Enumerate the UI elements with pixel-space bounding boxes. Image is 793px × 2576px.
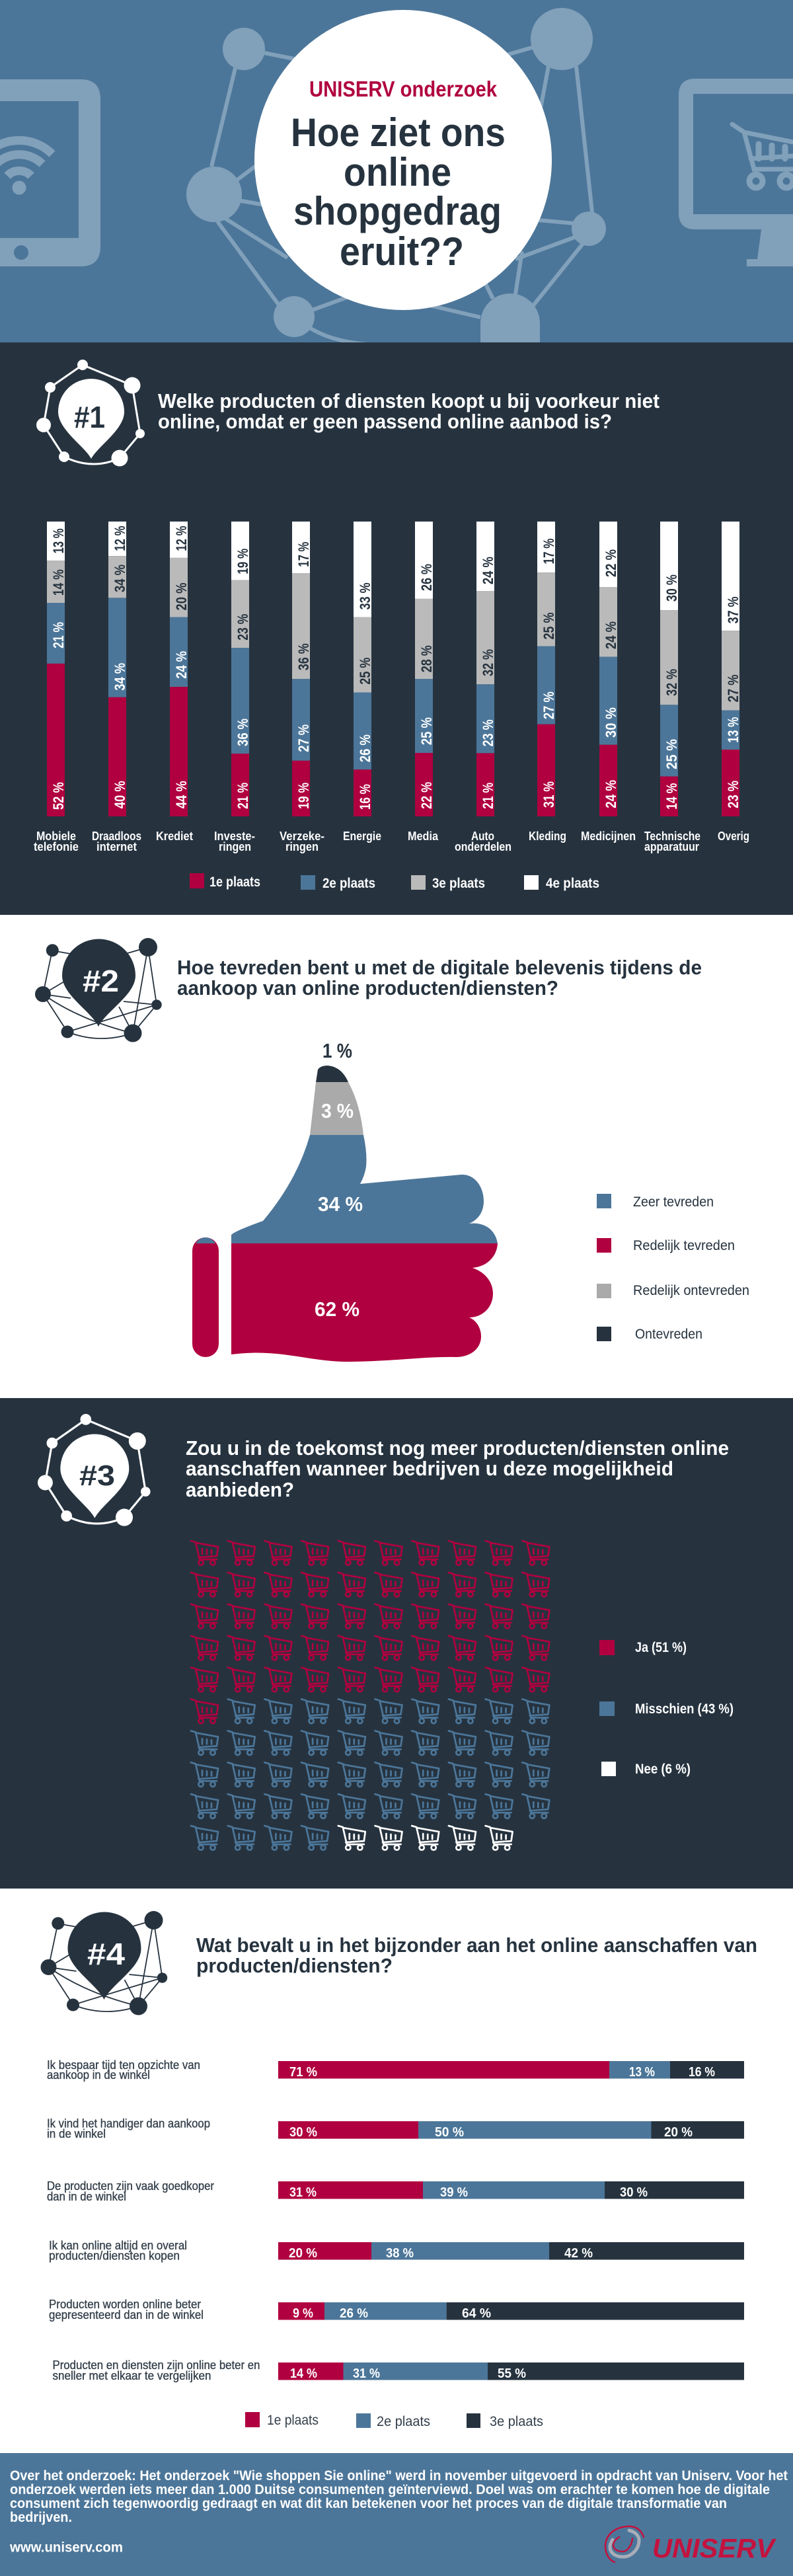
bar: Investeringen: 19 % <box>235 549 251 574</box>
legend 4: 1e plaats <box>267 2413 319 2428</box>
bar: Overig: 37 % <box>725 596 741 623</box>
icon: #4 pin <box>41 1911 167 2015</box>
icon: monitor with cart <box>679 79 793 266</box>
bar: Technische apparatuur: 30 % <box>663 574 680 602</box>
heading 4: Wat bevalt u in het bijzonder aan het online aanschaffen van <box>196 1933 757 1957</box>
bar: Energie: 26 % <box>357 734 373 762</box>
logo: Uniserv <box>605 2526 777 2563</box>
bar: Kleding: 25 % <box>541 612 557 640</box>
legend 1: 4e plaats <box>546 876 599 891</box>
bar: Auto onderdelen: 21 % <box>480 783 496 809</box>
heading 4: producten/diensten? <box>196 1954 393 1977</box>
thumb segment: 1 % <box>316 1066 348 1082</box>
category labels: Krediet <box>156 830 193 843</box>
thumbs-up chart <box>192 1039 498 1362</box>
stacked bar chart <box>47 522 741 816</box>
thumb cuff <box>192 1237 219 1357</box>
bar: Technische apparatuur: 25 % <box>663 739 680 769</box>
bar: Overig: 23 % <box>725 781 741 808</box>
category labels: Media <box>408 830 439 843</box>
row 6 <box>53 2359 744 2382</box>
bar: Verzekeringen: 19 % <box>295 783 312 809</box>
bar: Verzekeringen: 36 % <box>295 643 312 670</box>
legend 3: Nee (6 %) <box>635 1762 691 1777</box>
row 6: sneller met elkaar te vergelijken <box>53 2369 211 2382</box>
bar: Medicijnen: 30 % <box>603 707 619 738</box>
value labels <box>315 1039 363 1321</box>
row 5: Producten worden online beter <box>49 2298 201 2311</box>
network graphic <box>186 8 606 345</box>
category labels: Verzeke- <box>280 830 324 843</box>
bar: Overig: 27 % <box>725 674 741 702</box>
bar: Energie: 25 % <box>357 658 373 685</box>
bar: Investeringen: 23 % <box>235 614 251 641</box>
cart pictogram grid <box>191 1541 549 1850</box>
row 3: 30 % <box>620 2185 648 2200</box>
bar: Kleding: 31 % <box>541 781 557 808</box>
category labels: telefonie <box>34 840 79 853</box>
title: online <box>344 150 451 194</box>
heading 3: aanschaffen wanneer bedrijven u deze mogelijkheid <box>186 1457 673 1480</box>
row 3 <box>47 2179 744 2203</box>
row 6: 31 % <box>353 2366 380 2381</box>
legend 1: 3e plaats <box>432 876 485 891</box>
about text: onderzoek werden iets meer dan 1.000 Duitse consumenten geïnterviewd. Doel was om erachter te komen hoe de digitale <box>10 2482 770 2497</box>
icon: #4 pin: #4 <box>87 1937 125 1971</box>
bar: Investeringen: 36 % <box>235 719 251 746</box>
value labels: 62 % <box>315 1298 359 1321</box>
panel: footer <box>0 2453 793 2576</box>
carts: Misschien <box>191 1699 549 1850</box>
heading 4 <box>196 1933 757 1977</box>
panel: header <box>0 0 793 345</box>
row 4: 42 % <box>564 2246 593 2261</box>
bar: Draadloos internet <box>108 522 128 816</box>
row 4: producten/diensten kopen <box>49 2249 180 2262</box>
row 6: 14 % <box>290 2366 317 2381</box>
bar: Medicijnen: 22 % <box>603 549 619 577</box>
legend 3: Misschien (43 %) <box>635 1701 734 1717</box>
row 4: 20 % <box>289 2246 317 2261</box>
category labels: Technische <box>644 830 700 843</box>
legend 2: Redelijk tevreden <box>633 1238 735 1253</box>
category labels <box>34 830 749 853</box>
category labels: Draadloos <box>92 830 141 843</box>
bar: Kleding: 17 % <box>541 538 557 565</box>
icon: #3 pin: #3 <box>79 1460 115 1492</box>
bar: Mobiele telefonie: 21 % <box>50 622 67 648</box>
bar: Auto onderdelen: 23 % <box>480 719 496 746</box>
bar: Draadloos internet: 34 % <box>112 565 128 592</box>
bar: Mobiele telefonie: 13 % <box>50 528 67 553</box>
row 3: 39 % <box>440 2185 468 2200</box>
about text: bedrijven. <box>10 2510 72 2525</box>
category labels: Overig <box>718 830 749 843</box>
carts: Nee <box>338 1826 513 1850</box>
row 1: Ik bespaar tijd ten opzichte van <box>47 2058 200 2072</box>
legend 4: 2e plaats <box>377 2414 430 2429</box>
row 2: 20 % <box>664 2125 693 2140</box>
bar: Krediet: 44 % <box>173 781 190 808</box>
row 3: De producten zijn vaak goedkoper <box>47 2179 214 2193</box>
row 4 <box>49 2239 744 2262</box>
panel: question 3 <box>0 1398 793 1889</box>
bar: Media <box>415 522 435 816</box>
legend 2 <box>597 1194 749 1342</box>
about text <box>10 2468 788 2525</box>
icon: tablet with wifi <box>0 79 100 266</box>
row 4: 38 % <box>386 2246 414 2261</box>
category labels: Energie <box>343 830 381 843</box>
panel: question 2 <box>0 915 793 1398</box>
row 2: 50 % <box>435 2125 464 2140</box>
icon: #3 pin <box>38 1414 151 1526</box>
row 1: aankoop in de winkel <box>47 2068 150 2082</box>
row 1: 71 % <box>289 2065 317 2080</box>
legend 2: Ontevreden <box>635 1327 702 1342</box>
bar: Medicijnen <box>599 522 619 816</box>
category labels: Auto <box>471 830 494 843</box>
category labels: ringen <box>285 840 319 853</box>
bar: Draadloos internet: 34 % <box>112 663 128 691</box>
row 5: 9 % <box>293 2306 313 2321</box>
bar: Krediet: 24 % <box>173 651 190 679</box>
icon: #2 pin <box>35 938 162 1042</box>
row 6: 55 % <box>498 2366 526 2381</box>
bar: Investeringen: 21 % <box>235 783 251 809</box>
icon: #1 pin <box>36 360 145 467</box>
title: shopgedrag <box>293 189 502 233</box>
row 4: Ik kan online altijd en overal <box>49 2239 187 2252</box>
category labels: Kleding <box>529 830 566 843</box>
bar: Media: 26 % <box>418 564 435 591</box>
row 2: 30 % <box>289 2125 317 2140</box>
bar: Technische apparatuur <box>660 522 680 816</box>
category labels: Investe- <box>214 830 255 843</box>
legend 1 <box>190 873 599 891</box>
logo: Uniserv: UNISERV <box>652 2533 777 2563</box>
bar: Auto onderdelen: 32 % <box>480 649 496 676</box>
row 1: 13 % <box>629 2065 655 2080</box>
bar: Draadloos internet: 12 % <box>112 526 128 551</box>
bar: Media: 25 % <box>418 717 435 745</box>
carts: Ja <box>191 1541 549 1723</box>
thumb segment: 3 % <box>310 1082 363 1135</box>
category labels: apparatuur <box>644 840 699 853</box>
bar: Auto onderdelen: 24 % <box>480 557 496 584</box>
legend 1: 2e plaats <box>322 876 375 891</box>
icon: #2 pin: #2 <box>83 964 119 998</box>
legend 4: 3e plaats <box>490 2414 543 2429</box>
legend 1: 1e plaats <box>209 875 260 890</box>
panel: question 1 <box>0 342 793 915</box>
title <box>291 110 506 274</box>
thumb segment: 62 % <box>231 1243 498 1362</box>
heading 3: Zou u in de toekomst nog meer producten/diensten online <box>186 1436 729 1460</box>
bar: Mobiele telefonie <box>47 522 67 816</box>
category labels: Medicijnen <box>581 830 636 843</box>
bar: Mobiele telefonie: 52 % <box>50 782 67 810</box>
title circle <box>254 10 552 310</box>
bar: Draadloos internet: 40 % <box>112 781 128 808</box>
value labels: 1 % <box>322 1039 352 1062</box>
legend 3 <box>599 1640 734 1777</box>
heading 3 <box>186 1436 729 1501</box>
subtitle: UNISERV onderzoek <box>309 77 498 101</box>
category labels: internet <box>96 840 137 853</box>
value labels: 3 % <box>321 1099 354 1122</box>
bar: Krediet: 12 % <box>173 526 190 551</box>
row 6: Producten en diensten zijn online beter en <box>53 2359 260 2372</box>
bar: Energie: 16 % <box>357 784 373 810</box>
bar: Kleding: 27 % <box>541 691 557 719</box>
row 5: 26 % <box>340 2306 368 2321</box>
bar: Energie: 33 % <box>357 582 373 609</box>
panel: question 4 <box>0 1889 793 2453</box>
row 3: dan in de winkel <box>47 2190 126 2203</box>
bar: Investeringen <box>231 522 251 816</box>
bar: Krediet <box>170 522 190 816</box>
row 5: 64 % <box>462 2306 491 2321</box>
row 2: Ik vind het handiger dan aankoop <box>47 2117 210 2130</box>
thumb segment: 34 % <box>231 1135 498 1243</box>
bar: Verzekeringen <box>292 522 312 816</box>
bar: Overig: 13 % <box>725 717 741 743</box>
bar: Media: 28 % <box>418 645 435 672</box>
row 3: 31 % <box>289 2185 317 2200</box>
heading 1: online, omdat er geen passend online aanbod is? <box>158 410 612 433</box>
category labels: ringen <box>219 840 251 853</box>
bar: Verzekeringen: 27 % <box>295 724 312 752</box>
row 1 <box>47 2058 744 2082</box>
bar: Kleding <box>537 522 557 816</box>
bar: Media: 22 % <box>418 782 435 809</box>
bar: Auto onderdelen <box>476 522 496 816</box>
row 5: gepresenteerd dan in de winkel <box>49 2308 204 2322</box>
category labels: Mobiele <box>36 830 76 843</box>
bar: Medicijnen: 24 % <box>603 780 619 808</box>
heading 2 <box>177 956 702 999</box>
bar: Medicijnen: 24 % <box>603 621 619 649</box>
title: eruit?? <box>340 229 464 274</box>
title: Hoe ziet ons <box>291 110 506 155</box>
heading 3: aanbieden? <box>186 1478 294 1501</box>
bar: Technische apparatuur: 14 % <box>663 783 680 810</box>
about text: consument zich tegenwoordig gedraagt en wat dit kan betekenen voor het proces van de digitale transformatie van <box>10 2496 727 2511</box>
bar: Verzekeringen: 17 % <box>295 542 312 567</box>
row 2 <box>47 2117 744 2140</box>
heading 1: Welke producten of diensten koopt u bij voorkeur niet <box>158 389 660 412</box>
heading 2: aankoop van online producten/diensten? <box>177 976 558 999</box>
heading 1 <box>158 389 660 433</box>
heading 2: Hoe tevreden bent u met de digitale belevenis tijdens de <box>177 956 702 979</box>
row 1: 16 % <box>689 2065 715 2080</box>
legend 3: Ja (51 %) <box>635 1640 687 1655</box>
website: www.uniserv.com <box>9 2540 123 2556</box>
legend 2: Zeer tevreden <box>633 1194 714 1210</box>
bar: Overig <box>722 522 741 816</box>
row 5 <box>49 2298 744 2322</box>
category labels: onderdelen <box>455 840 511 853</box>
value labels: 34 % <box>318 1192 363 1216</box>
icon: #1 pin: #1 <box>74 400 105 434</box>
legend 4 <box>245 2412 543 2429</box>
row 2: in de winkel <box>47 2127 106 2140</box>
bar: Krediet: 20 % <box>173 583 190 611</box>
bar: Energie <box>354 522 373 816</box>
bar: Mobiele telefonie: 14 % <box>50 569 67 596</box>
legend 2: Redelijk ontevreden <box>633 1283 749 1298</box>
bar: Technische apparatuur: 32 % <box>663 669 680 696</box>
